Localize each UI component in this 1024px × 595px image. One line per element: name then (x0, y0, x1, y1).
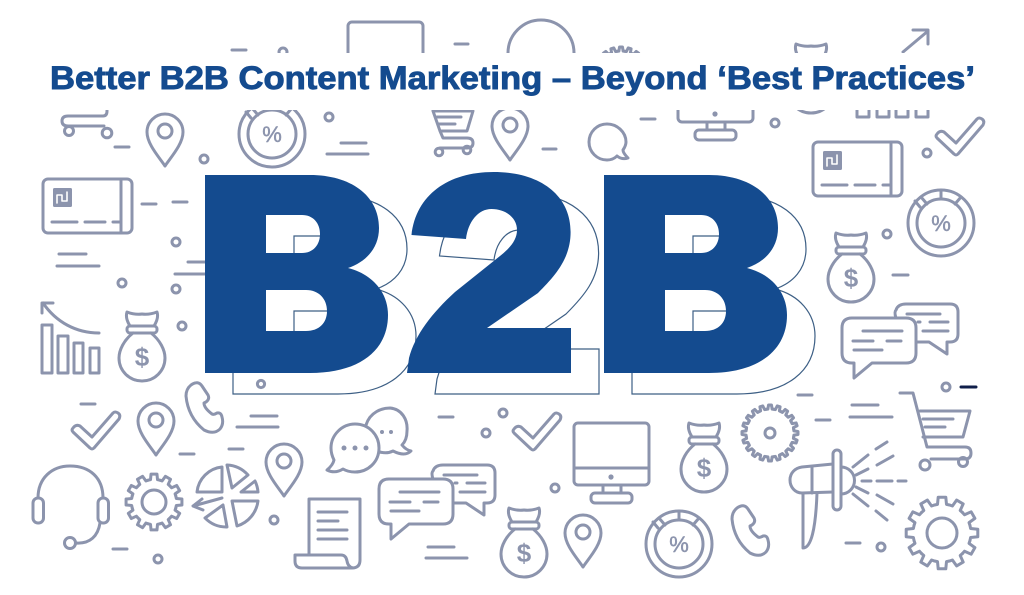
icon: percent donuts: % (262, 122, 282, 147)
icon: telephones (186, 383, 769, 555)
icon: headset (33, 466, 108, 548)
title band (0, 53, 1024, 110)
icon: monitor (574, 423, 649, 503)
icon: percent donuts (262, 122, 974, 577)
icon: check marks (72, 118, 984, 450)
icon: money bags: $ (844, 263, 859, 293)
icon: large gear (906, 497, 978, 569)
title: Better B2B Content Marketing – Beyond ‘Best Practices’ (50, 60, 975, 96)
icon: shopping cart (900, 393, 971, 470)
icon: document scroll (295, 499, 360, 568)
icon: round chat bubbles (327, 124, 628, 472)
icon: declining bar chart (42, 303, 99, 373)
icon: money bags: $ (135, 342, 150, 372)
icon: percent donuts: % (931, 211, 951, 236)
icon: pie chart with arrow (193, 465, 258, 527)
icon: money bags: $ (517, 538, 532, 568)
icon: credit cards (43, 142, 902, 233)
icon: megaphone (790, 442, 906, 548)
icon: location pins (138, 114, 601, 567)
icon: saw gear (742, 405, 798, 461)
background icons: top row, cropped by title band (62, 20, 928, 167)
icon: speech bubbles with text lines (379, 304, 958, 539)
icon: small gear (126, 474, 182, 530)
accent dashes and dots (57, 44, 976, 563)
B2B solid lettering (205, 172, 787, 373)
icon: money bags (119, 233, 874, 577)
icon: percent donuts: % (669, 532, 689, 557)
icon: money bags: $ (697, 453, 712, 483)
B2B outline shadow (233, 193, 815, 394)
